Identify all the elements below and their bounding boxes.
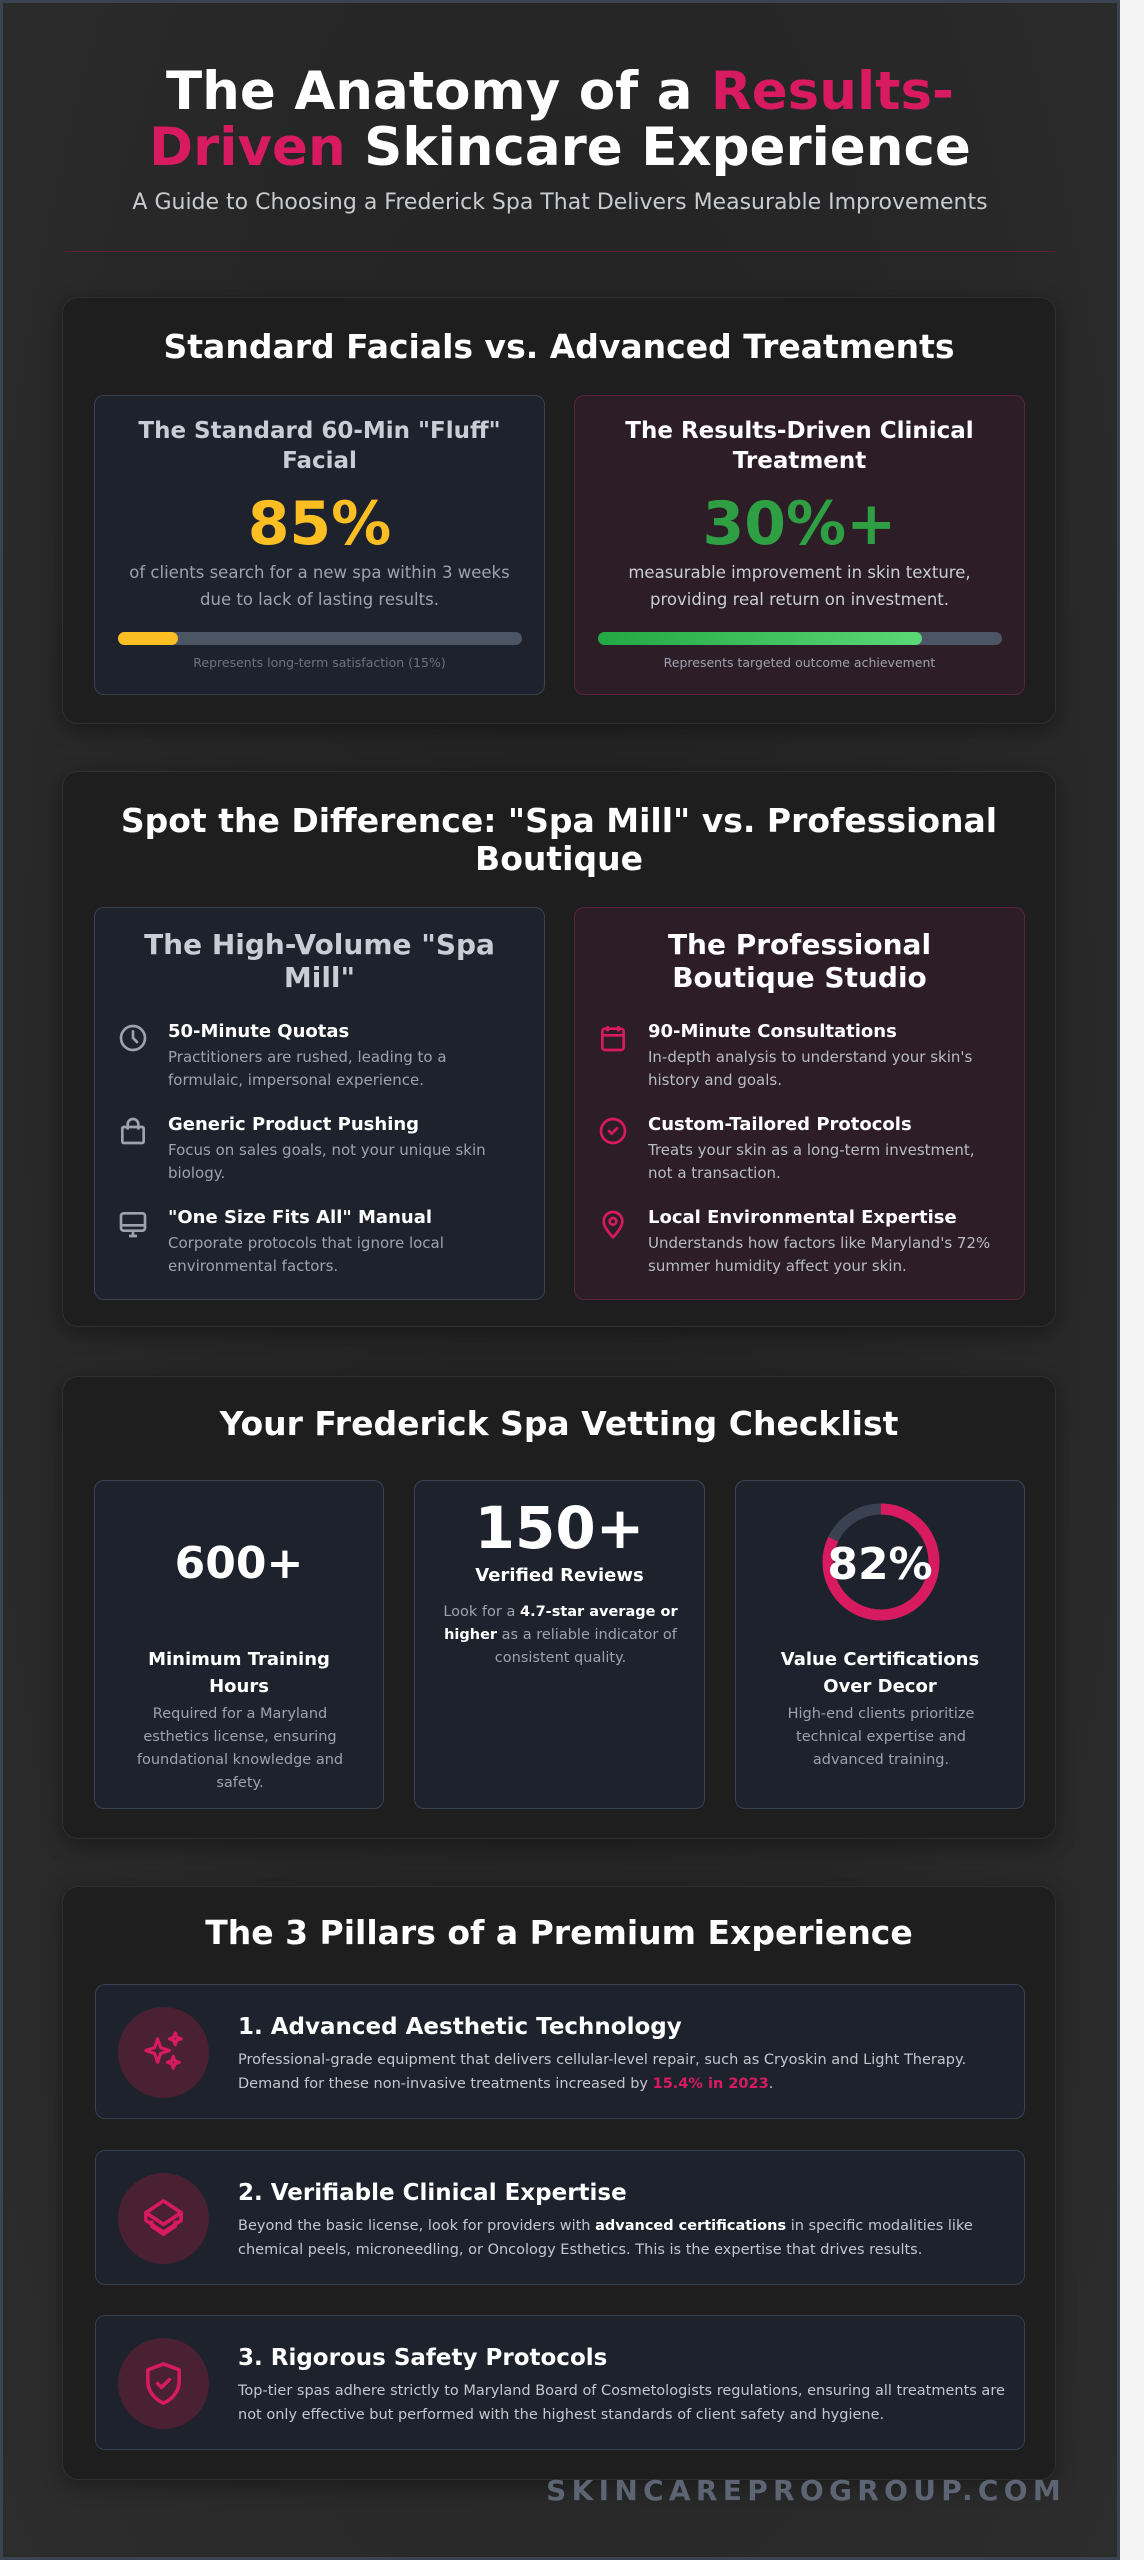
pillar 3: [95, 2315, 1025, 2450]
card: standard facial: The Standard 60-Min "Fluff": [138, 418, 501, 444]
item: manual: [120, 1207, 444, 1275]
bar: [118, 632, 522, 645]
card: standard facial: [94, 395, 545, 695]
bar: [598, 632, 1002, 645]
icon: graduation cap: [118, 2173, 209, 2264]
card: reviews: Look for a 4.7-star average or higher as a reliable indicator of consistent quality.: [443, 1604, 678, 1666]
card: reviews: [414, 1480, 705, 1809]
pillar 2: [95, 2150, 1025, 2285]
card: standard facial: Represents long-term satisfaction (15%): [193, 655, 446, 670]
card: standard facial: 85%: [248, 489, 391, 559]
card: training hours: Minimum Training: [148, 1649, 330, 1670]
item: custom protocols: [600, 1114, 975, 1182]
card: standard facial: Facial: [282, 448, 357, 474]
item: product pushing: [121, 1114, 486, 1182]
item: local expertise: Understands how factors like Maryland's 72% summer humidity affect your skin.: [648, 1234, 990, 1275]
card: clinical: Represents targeted outcome achievement: [664, 655, 935, 670]
panel: vetting checklist: [62, 1376, 1056, 1839]
item: quotas: 50-Minute Quotas: [168, 1021, 349, 1042]
card: reviews: Verified Reviews: [475, 1565, 644, 1586]
panel: spa mill vs boutique: [62, 771, 1056, 1327]
icon: sparkles: [118, 2007, 209, 2098]
card: training hours: 600+: [175, 1538, 303, 1589]
card: training hours: Required for a Maryland esthetics license, ensuring foundational knowledge and safety.: [137, 1706, 343, 1791]
card: clinical: measurable improvement in skin texture,: [628, 563, 971, 582]
card: boutique: Boutique Studio: [672, 961, 927, 994]
item: consultations: 90-Minute Consultations: [648, 1021, 897, 1042]
pillar 2: Beyond the basic license, look for providers with advanced certifications in specific modalities like chemical peels, microneedling, or Oncology Esthetics. This is the expertise that drives results.: [238, 2218, 973, 2258]
item: consultations: In-depth analysis to understand your skin's history and goals.: [648, 1048, 972, 1089]
card: standard facial: due to lack of lasting results.: [200, 590, 439, 609]
item: local expertise: Local Environmental Expertise: [648, 1207, 957, 1228]
item: quotas: [120, 1021, 447, 1089]
panel: standard vs advanced: [62, 297, 1056, 724]
pillar 2: 2. Verifiable Clinical Expertise: [238, 2180, 627, 2206]
item: local expertise: [602, 1207, 990, 1275]
item: manual: Corporate protocols that ignore local environmental factors.: [168, 1234, 444, 1275]
card: training hours: Hours: [209, 1676, 269, 1697]
card: clinical: 30%+: [703, 489, 896, 559]
heading: [121, 801, 997, 878]
card: boutique: [574, 907, 1025, 1300]
card: reviews: 150+: [475, 1494, 644, 1562]
card: spa mill: Mill": [284, 961, 355, 994]
pillar 1: 1. Advanced Aesthetic Technology: [238, 2014, 682, 2040]
subtitle: A Guide to Choosing a Frederick Spa That Delivers Measurable Improvements: [132, 190, 988, 215]
item: consultations: [601, 1021, 972, 1089]
item: quotas: Practitioners are rushed, leading to a formulaic, impersonal experience.: [168, 1048, 447, 1089]
card: certifications donut: 82%: [827, 1539, 933, 1590]
heading: Your Frederick Spa Vetting Checklist: [220, 1404, 898, 1443]
card: certifications donut: Value Certifications: [781, 1649, 979, 1670]
card: certifications donut: High-end clients prioritize technical expertise and advanced training.: [788, 1706, 974, 1768]
title: The Anatomy of a Results-: [166, 61, 954, 122]
item: custom protocols: Custom-Tailored Protocols: [648, 1114, 912, 1135]
heading: Boutique: [475, 839, 643, 878]
item: manual: "One Size Fits All" Manual: [168, 1207, 432, 1228]
card: boutique: The Professional: [668, 928, 931, 961]
panel: 3 pillars: [62, 1886, 1056, 2480]
card: clinical: [574, 395, 1025, 695]
pillar 3: Top-tier spas adhere strictly to Maryland Board of Cosmetologists regulations, ensuring all treatments are not only effective but performed with the highest standards of client safety and hygiene.: [238, 2383, 1005, 2423]
card: clinical: The Results-Driven Clinical: [625, 418, 974, 444]
icon: shield: [118, 2338, 209, 2429]
card: training hours: [94, 1480, 384, 1809]
pillar 3: 3. Rigorous Safety Protocols: [238, 2345, 607, 2371]
card: spa mill: [94, 907, 545, 1300]
card: clinical: Treatment: [733, 448, 866, 474]
heading: Spot the Difference: "Spa Mill" vs. Professional: [121, 801, 997, 840]
card: standard facial: of clients search for a new spa within 3 weeks: [129, 563, 510, 582]
item: product pushing: Generic Product Pushing: [168, 1114, 419, 1135]
pillar 1: Professional-grade equipment that delivers cellular-level repair, such as Cryoskin and Light Therapy. Demand for these non-invasive treatments increased by 15.4% in 2023.: [238, 2052, 966, 2092]
title: [149, 61, 971, 178]
heading: Standard Facials vs. Advanced Treatments: [164, 327, 954, 366]
item: product pushing: Focus on sales goals, not your unique skin biology.: [168, 1141, 486, 1182]
card: clinical: providing real return on investment.: [650, 590, 949, 609]
title: Driven Skincare Experience: [149, 117, 971, 178]
card: spa mill: The High-Volume "Spa: [144, 928, 495, 961]
footer brand: SKINCAREPROGROUP.COM: [546, 2474, 1066, 2507]
pillar 1: [95, 1984, 1025, 2119]
card: certifications donut: [735, 1480, 1025, 1809]
card: certifications donut: Over Decor: [823, 1676, 937, 1697]
item: custom protocols: Treats your skin as a long-term investment, not a transaction.: [648, 1141, 975, 1182]
heading: The 3 Pillars of a Premium Experience: [205, 1913, 913, 1952]
